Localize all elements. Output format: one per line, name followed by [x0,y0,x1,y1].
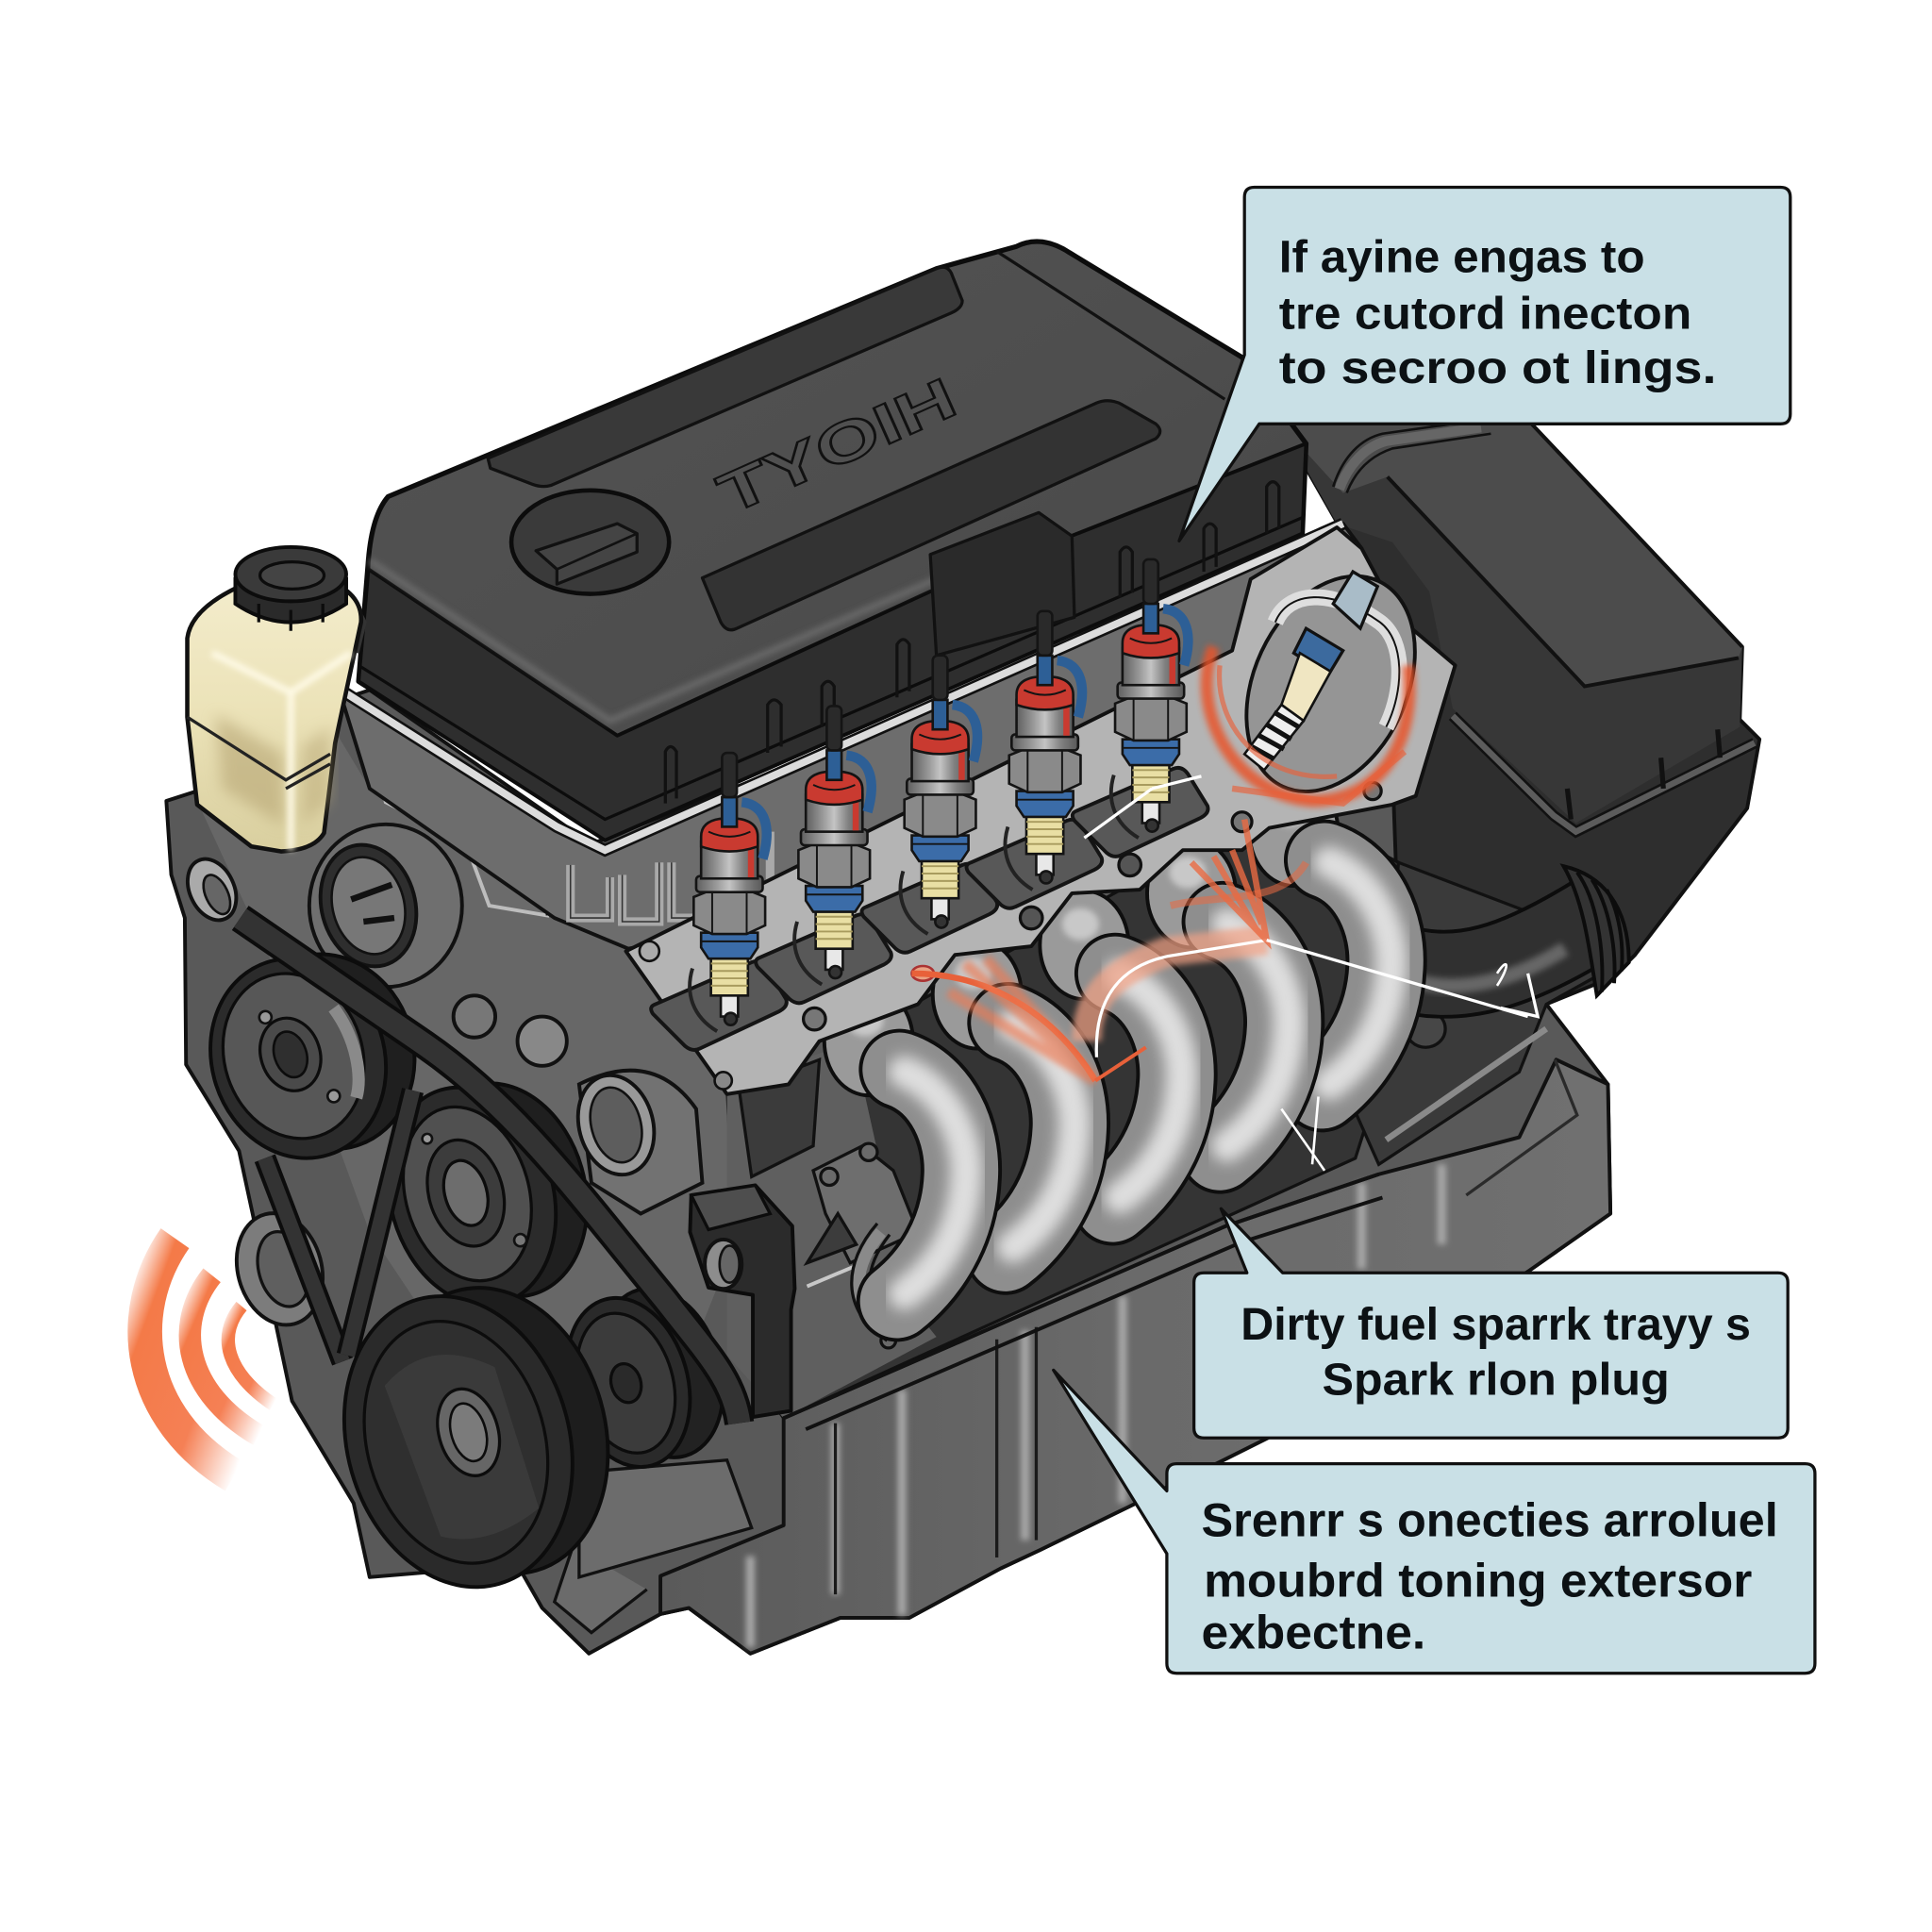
valve cover [358,242,1306,841]
cylinder head [339,524,1361,949]
magnified spark plug [1207,549,1448,819]
rear block on cover [930,512,1074,656]
callout: middle: Spark rlon plug [1322,1355,1670,1406]
pan stripes [750,1164,1441,1647]
lower raised panel [702,401,1160,630]
pulley: crankshaft [311,1258,641,1614]
callout: middle [1194,1208,1788,1438]
callout: bottom: exbectne. [1201,1607,1425,1659]
callout: top: to secroo ot lings. [1279,342,1716,393]
head gasket strip [339,524,1343,850]
raised panel [488,267,962,487]
callout: bottom: moubrd toning extersor [1204,1555,1752,1607]
pulley: upper left [185,926,440,1181]
engine block silhouette [166,591,1610,1654]
heat flow streaks [912,776,1538,1171]
engine accessories behind pulleys [225,824,794,1577]
vibration arcs [145,1239,274,1476]
cover logo: TYOIH [708,366,965,526]
callout: middle: Dirty fuel sparrk trayy s [1241,1299,1751,1350]
lower rim and hose area [1343,862,1629,1164]
callout: bottom: Srenrr s onecties arroluel [1201,1494,1778,1547]
mid block behind manifold [727,801,1398,1418]
callout: bottom [1054,1370,1815,1674]
coolant reservoir [188,547,365,852]
cover front skirt [358,443,1306,841]
callout: top: If ayine engas to [1279,232,1645,283]
cylinder head gasket [626,527,1456,1094]
oil pan [555,1059,1610,1654]
air box [1281,420,1759,1004]
pulley: right idler [548,1274,742,1482]
drive belt [241,918,740,1424]
spark plugs row [690,559,1188,1031]
pulley: middle [363,1058,611,1325]
callout: top: tre cutord inecton [1279,289,1691,340]
cover ribs [665,482,1279,804]
oil filler cap [511,491,669,594]
exhaust manifold pipes [824,777,1391,1301]
callout: top [1179,188,1790,541]
